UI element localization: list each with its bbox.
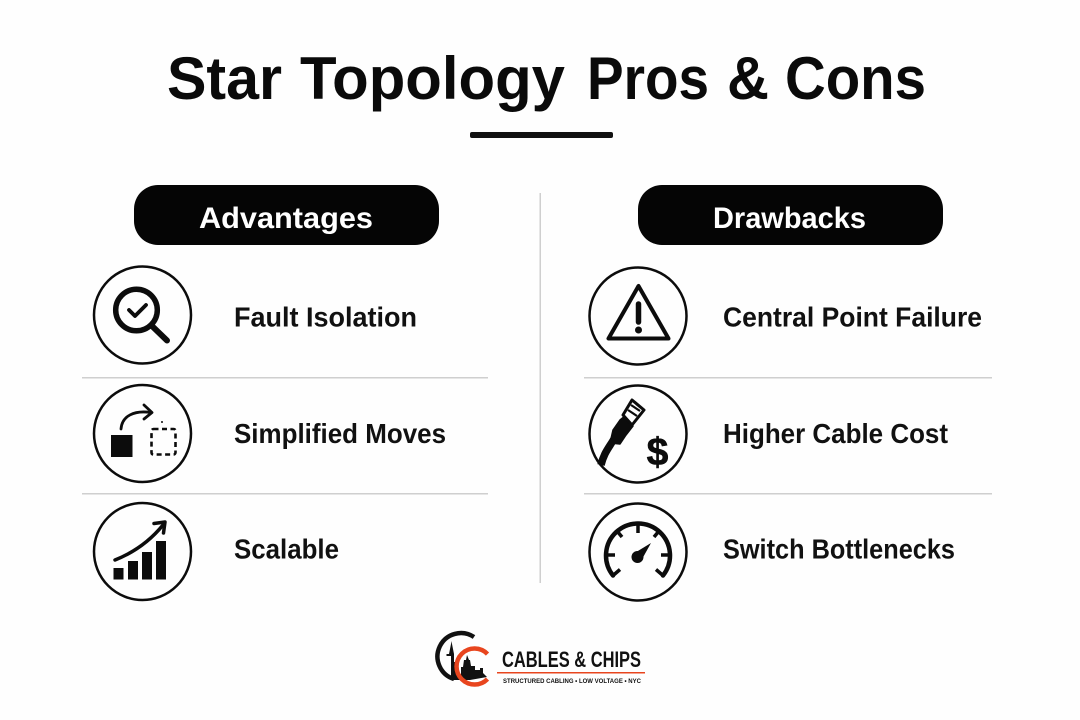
- title: &: [727, 45, 769, 112]
- icon: cable and dollar: [590, 386, 686, 482]
- icon: cable and dollar: $: [647, 431, 669, 474]
- title: [167, 45, 926, 112]
- logo name: CABLES & CHIPS: [502, 647, 641, 672]
- logo tagline: STRUCTURED CABLING • LOW VOLTAGE • NYC: [503, 679, 642, 685]
- icon: growth bars: [94, 503, 191, 600]
- title: Cons: [785, 45, 926, 112]
- logo mark: [437, 633, 488, 684]
- label: simplified moves: Simplified Moves: [234, 418, 446, 449]
- icon: warning triangle: [590, 268, 686, 364]
- heading: advantages: [134, 185, 439, 245]
- heading: drawbacks: Drawbacks: [713, 202, 866, 235]
- label: fault isolation: Fault Isolation: [234, 302, 417, 332]
- center divider: [540, 193, 541, 583]
- label: switch bottlenecks: Switch Bottlenecks: [723, 534, 955, 564]
- icon: move box: [94, 385, 191, 482]
- panel: drawbacks: [584, 185, 992, 600]
- icon: magnifier with check: [94, 266, 191, 364]
- panel: advantages: [82, 185, 488, 600]
- heading: advantages: Advantages: [199, 202, 373, 235]
- title: Pros: [587, 45, 709, 112]
- label: scalable: Scalable: [234, 534, 339, 564]
- title: Star: [167, 45, 282, 112]
- label: central point failure: Central Point Failure: [723, 302, 982, 332]
- icon: gauge: [590, 504, 686, 600]
- heading: drawbacks: [638, 185, 943, 245]
- logo: cables and chips: [437, 633, 645, 685]
- label: higher cable cost: Higher Cable Cost: [723, 418, 948, 449]
- title underline: [470, 132, 613, 138]
- title: Topology: [300, 45, 566, 112]
